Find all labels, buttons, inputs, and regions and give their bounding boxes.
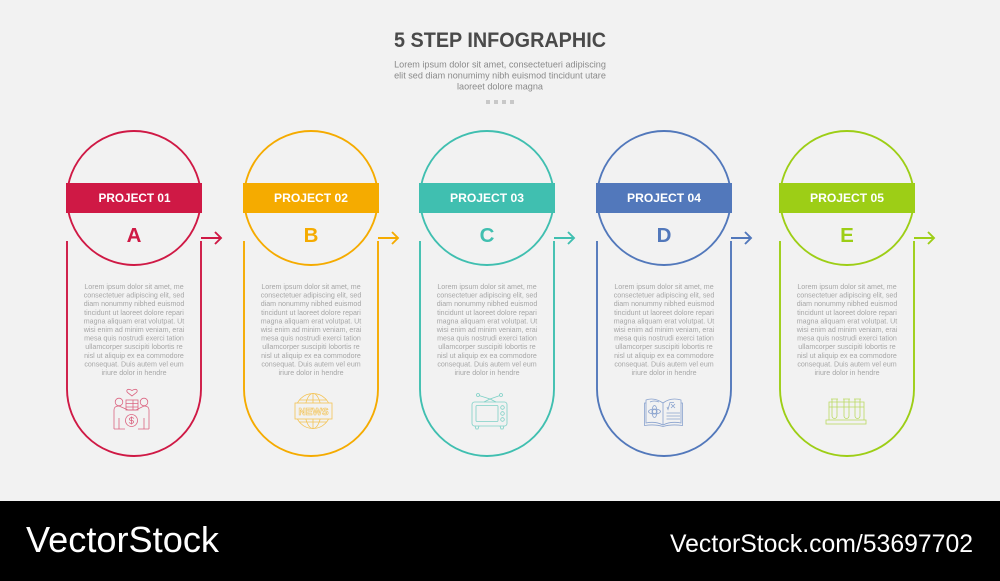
body text 02: iriure dolor in hendre [278, 369, 344, 377]
capsule body 04 [597, 241, 731, 456]
body text 04: Lorem ipsum dolor sit amet, me [614, 283, 714, 291]
body text 02: mesa quis nostrudi exerci tation [261, 335, 361, 343]
body text 02: consectetuer adipiscing elit, sed [261, 292, 361, 300]
header band 03 [419, 183, 555, 213]
circle outline 02 [244, 131, 378, 265]
circle outline 01 [67, 131, 201, 265]
body text 04: ullamcorper suscipiti lobortis re [615, 343, 713, 351]
body text 04: tincidunt ut laoreet dolore repari [614, 309, 714, 317]
body text 02: magna aliquam erat volutpat. Ut [261, 317, 361, 325]
subtitle text [394, 60, 606, 92]
arrow 03 [554, 232, 574, 244]
circle outline 03 [420, 131, 554, 265]
footer logo: VectorStock [26, 519, 220, 560]
letter E: E [840, 224, 854, 247]
header band 05 [779, 183, 915, 213]
body text 04: diam nonummy nibhed euismod [614, 300, 714, 308]
body text 02: nisl ut aliquip ex ea commodore [261, 352, 361, 360]
body text 01: ullamcorper suscipiti lobortis re [85, 343, 183, 351]
body text 05 [796, 283, 898, 377]
capsule body 03 [420, 241, 554, 456]
body text 05: wisi enim ad minim veniam, erai [796, 326, 898, 334]
footer url: VectorStock.com/53697702 [670, 530, 973, 558]
body text 01 [83, 283, 185, 377]
capsule body 05 [780, 241, 914, 456]
heading 04: PROJECT 04 [627, 191, 701, 205]
subtitle text: elit sed diam nonumimy nibh euismod tincidunt utare [394, 70, 606, 80]
body text 05: consequat. Duis autem vel eum [797, 360, 897, 368]
arrow 05 [914, 232, 934, 244]
capsule body 02 [244, 241, 378, 456]
body text 01: Lorem ipsum dolor sit amet, me [84, 283, 184, 291]
icon: television [472, 394, 507, 429]
body text 01: mesa quis nostrudi exerci tation [84, 335, 184, 343]
body text 03: wisi enim ad minim veniam, erai [436, 326, 538, 334]
body text 03: magna aliquam erat volutpat. Ut [437, 317, 537, 325]
body text 02: consequat. Duis autem vel eum [261, 360, 361, 368]
title: 5 STEP INFOGRAPHIC [394, 29, 606, 52]
body text 04: iriure dolor in hendre [631, 369, 697, 377]
body text 01: iriure dolor in hendre [101, 369, 167, 377]
body text 05: iriure dolor in hendre [814, 369, 880, 377]
letter B: B [304, 224, 318, 247]
body text 03: tincidunt ut laoreet dolore repari [437, 309, 537, 317]
body text 04: magna aliquam erat volutpat. Ut [614, 317, 714, 325]
arrow 02 [378, 232, 398, 244]
body text 04: mesa quis nostrudi exerci tation [614, 335, 714, 343]
icon: test tube rack [826, 399, 866, 424]
body text 02 [260, 283, 362, 377]
pagination dots [486, 100, 514, 104]
body text 03 [436, 283, 538, 377]
icon: people with heart and money [114, 389, 149, 429]
body text 05: Lorem ipsum dolor sit amet, me [797, 283, 897, 291]
body text 04 [613, 283, 715, 377]
body text 02: wisi enim ad minim veniam, erai [260, 326, 362, 334]
body text 03: ullamcorper suscipiti lobortis re [438, 343, 536, 351]
body text 03: nisl ut aliquip ex ea commodore [437, 352, 537, 360]
subtitle text: laoreet dolore magna [457, 82, 544, 92]
heading 02: PROJECT 02 [274, 191, 348, 205]
body text 02: Lorem ipsum dolor sit amet, me [261, 283, 361, 291]
header band 01 [66, 183, 202, 213]
body text 04: consectetuer adipiscing elit, sed [614, 292, 714, 300]
circle outline 05 [780, 131, 914, 265]
body text 01: consectetuer adipiscing elit, sed [84, 292, 184, 300]
icon: open science book [644, 399, 682, 426]
body text 01: consequat. Duis autem vel eum [84, 360, 184, 368]
body text 04: wisi enim ad minim veniam, erai [613, 326, 715, 334]
body text 05: tincidunt ut laoreet dolore repari [797, 309, 897, 317]
body text 05: ullamcorper suscipiti lobortis re [798, 343, 896, 351]
letter C: C [480, 224, 495, 247]
body text 04: consequat. Duis autem vel eum [614, 360, 714, 368]
body text 05: nisl ut aliquip ex ea commodore [797, 352, 897, 360]
body text 03: consequat. Duis autem vel eum [437, 360, 537, 368]
footer bar [0, 501, 1000, 581]
panel: project 01 [66, 131, 221, 456]
body text 03: mesa quis nostrudi exerci tation [437, 335, 537, 343]
circle outline 04 [597, 131, 731, 265]
body text 05: magna aliquam erat volutpat. Ut [797, 317, 897, 325]
body text 03: consectetuer adipiscing elit, sed [437, 292, 537, 300]
header band 02 [243, 183, 379, 213]
body text 02: diam nonummy nibhed euismod [261, 300, 361, 308]
letter D: D [657, 224, 671, 247]
heading 01: PROJECT 01 [98, 191, 171, 205]
subtitle text: Lorem ipsum dolor sit amet, consectetueri adipiscing [394, 60, 606, 70]
body text 04: nisl ut aliquip ex ea commodore [614, 352, 714, 360]
panel: project 02 [243, 131, 398, 456]
panel: project 04 [596, 131, 751, 456]
capsule body 01 [67, 241, 201, 456]
arrow 01 [201, 232, 221, 244]
body text 01: wisi enim ad minim veniam, erai [83, 326, 185, 334]
panel: project 03 [419, 131, 574, 456]
body text 03: iriure dolor in hendre [454, 369, 520, 377]
body text 01: tincidunt ut laoreet dolore repari [84, 309, 184, 317]
heading 03: PROJECT 03 [450, 191, 524, 205]
panel: project 05 [779, 131, 934, 456]
body text 02: tincidunt ut laoreet dolore repari [261, 309, 361, 317]
body text 05: diam nonummy nibhed euismod [797, 300, 897, 308]
body text 05: consectetuer adipiscing elit, sed [797, 292, 897, 300]
header band 04 [596, 183, 732, 213]
body text 01: nisl ut aliquip ex ea commodore [84, 352, 184, 360]
icon: news globe: NEWS [298, 407, 329, 418]
letter A: A [127, 224, 142, 247]
body text 05: mesa quis nostrudi exerci tation [797, 335, 897, 343]
icon: news globe [295, 394, 332, 428]
body text 01: magna aliquam erat volutpat. Ut [84, 317, 184, 325]
heading 05: PROJECT 05 [810, 191, 884, 205]
body text 03: diam nonummy nibhed euismod [437, 300, 537, 308]
body text 01: diam nonummy nibhed euismod [84, 300, 184, 308]
arrow 04 [731, 232, 751, 244]
body text 02: ullamcorper suscipiti lobortis re [262, 343, 360, 351]
body text 03: Lorem ipsum dolor sit amet, me [437, 283, 537, 291]
